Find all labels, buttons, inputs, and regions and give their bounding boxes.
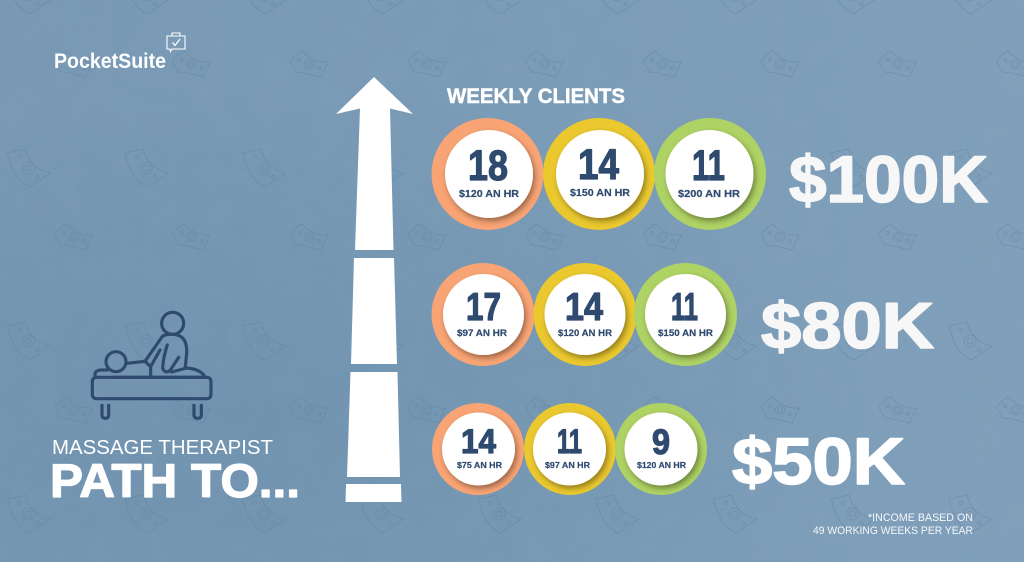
circle: 11 clients at $97: $97 AN HR: [545, 460, 590, 470]
heading: massage therapist path to: MASSAGE THERAPIST: [52, 436, 273, 459]
circle: 14 clients at $75: 14: [461, 423, 496, 461]
circle: 18 clients at $120: [432, 118, 544, 230]
icon: briefcase with check: [167, 33, 185, 52]
circle: 14 clients at $120: $120 AN HR: [558, 328, 612, 339]
circle: 9 clients at $120: $120 AN HR: [637, 460, 686, 470]
circle: 11 clients at $200: $200 AN HR: [678, 188, 740, 200]
circle: 14 clients at $150: 14: [578, 141, 619, 189]
circle: 14 clients at $120: 14: [565, 286, 603, 329]
circle: 17 clients at $97: [432, 263, 534, 366]
footnote: *INCOME BASED ON: [868, 512, 973, 524]
circle: 18 clients at $120: $120 AN HR: [459, 188, 519, 200]
logo: PocketSuite: [54, 33, 185, 73]
circle: 11 clients at $200: 11: [692, 142, 725, 190]
circle: 11 clients at $150: 11: [671, 286, 698, 329]
income: $80K: $80K: [761, 289, 934, 362]
circle: 17 clients at $97: $97 AN HR: [457, 328, 507, 339]
circle: 11 clients at $200: [654, 118, 766, 230]
heading: massage therapist path to: PATH TO...: [50, 454, 300, 507]
footnote: [813, 512, 973, 537]
row: $80K clients: [432, 263, 737, 366]
circle: 14 clients at $75: $75 AN HR: [457, 460, 502, 470]
circle: 11 clients at $150: $150 AN HR: [658, 328, 713, 339]
circle: 11 clients at $150: [634, 263, 737, 366]
circle: 14 clients at $150: [543, 118, 655, 230]
heading: weekly clients: WEEKLY CLIENTS: [447, 85, 625, 108]
logo: PocketSuite: PocketSuite: [54, 49, 166, 73]
row: $50K clients: [432, 403, 707, 495]
income: $50K: $50K: [732, 424, 905, 498]
row: $100K clients: [432, 118, 766, 230]
arrow: segmented upward road: [336, 77, 413, 502]
circle: 14 clients at $75: [432, 403, 524, 495]
circle: 17 clients at $97: 17: [466, 286, 501, 329]
circle: 11 clients at $97: [524, 403, 616, 495]
circle: 18 clients at $120: 18: [468, 142, 508, 190]
income: $100K: $100K: [789, 142, 988, 216]
footnote: 49 WORKING WEEKS PER YEAR: [813, 525, 973, 537]
icon: massage therapist and client on table: [92, 312, 211, 418]
circle: 14 clients at $120: [534, 263, 636, 366]
circle: 9 clients at $120: [615, 403, 707, 495]
circle: 11 clients at $97: 11: [557, 423, 582, 461]
circle: 9 clients at $120: 9: [652, 423, 670, 462]
circle: 14 clients at $150: $150 AN HR: [570, 187, 630, 199]
